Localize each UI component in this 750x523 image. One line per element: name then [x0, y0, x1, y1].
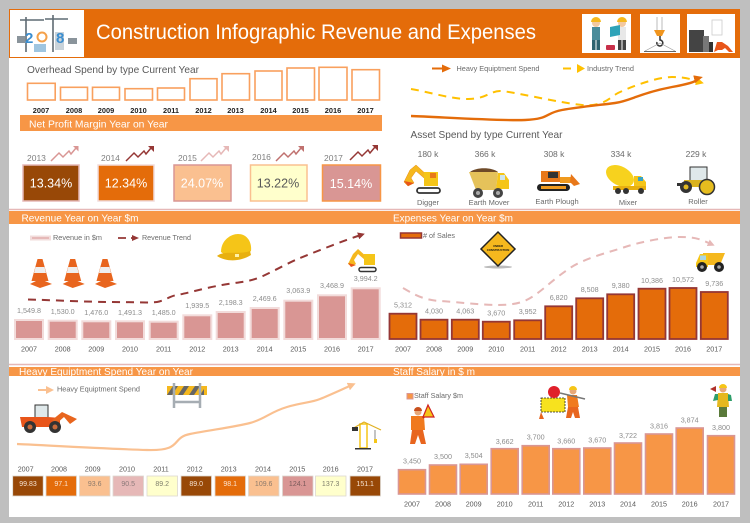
panel: revenue	[9, 211, 389, 354]
outlined bars	[28, 67, 380, 100]
year axis: heavy equipment: 2007	[18, 464, 34, 474]
icon: wheel loader	[20, 405, 77, 433]
value labels: heavy equipment cells: 151.1	[356, 481, 374, 488]
title: Construction Infographic Revenue and Expenses	[96, 21, 536, 44]
year axis: staff salary	[404, 500, 729, 508]
kpi 2014	[98, 146, 154, 201]
heading band: staff salary: Staff Salary in $ m	[393, 366, 475, 378]
icon: worker with warning sign	[410, 405, 434, 444]
value labels: expenses: 9,380	[612, 281, 630, 290]
heading band: revenue	[9, 211, 389, 224]
icon: buildings and excavator	[687, 14, 735, 53]
kpi 2013: 2013	[27, 153, 46, 163]
line: expense trend	[403, 237, 711, 305]
icon: workers	[582, 14, 631, 53]
panel: staff salary	[389, 366, 740, 508]
year axis: staff salary: 2009	[466, 500, 482, 508]
kpi 2016: 2016	[252, 152, 271, 162]
value labels: expenses: 9,736	[705, 279, 723, 288]
year axis: 2016	[325, 106, 341, 115]
kpi 2013: 13.34%	[30, 176, 72, 190]
heading band: Net Profit Margin Year on Year	[29, 118, 168, 130]
year axis: revenue: 2014	[257, 344, 273, 354]
year axis: staff salary: 2010	[497, 500, 513, 508]
line: heavy equipment	[17, 385, 352, 450]
bar chart: expenses	[390, 288, 728, 339]
legend: expenses: # of Sales	[423, 231, 455, 240]
value labels: expenses: 3,670	[487, 308, 505, 318]
legend: revenue	[31, 233, 102, 242]
legend: heavy equipment spend: Heavy Equiptment Spend	[456, 64, 540, 73]
kpi 2017: 2017	[324, 153, 343, 163]
year axis: staff salary: 2015	[651, 500, 667, 508]
heading band: heavy equipment	[9, 366, 389, 378]
value labels: heavy equipment cells: 97.1	[54, 481, 68, 488]
bar chart: staff salary	[398, 428, 734, 494]
value labels: staff salary: 3,700	[527, 432, 545, 442]
asset: earth plough	[535, 149, 580, 206]
asset: earth mover	[469, 149, 510, 207]
asset: digger: Digger	[417, 198, 440, 207]
year axis: 2007	[33, 106, 49, 115]
value labels: staff salary: 3,722	[619, 431, 637, 440]
kpi 2015: 2015	[178, 153, 197, 163]
value labels: staff salary: 3,816	[650, 422, 668, 430]
year axis: heavy equipment: 2009	[85, 464, 101, 474]
value labels: staff salary	[403, 416, 730, 466]
year axis: revenue: 2009	[88, 344, 104, 354]
year axis: heavy equipment: 2013	[221, 464, 237, 474]
value labels: heavy equipment cells: 89.0	[189, 481, 203, 488]
asset: earth mover: Earth Mover	[469, 198, 510, 207]
year axis: revenue: 2010	[122, 344, 138, 354]
value labels: staff salary: 3,500	[434, 452, 452, 461]
value labels: expenses: 4,030	[425, 306, 443, 316]
asset: earth plough: 308 k	[544, 149, 565, 159]
kpi 2017: 15.14%	[330, 177, 372, 191]
asset: roller: 229 k	[686, 149, 707, 159]
line: industry trend	[411, 77, 699, 105]
year axis: expenses: 2015	[644, 344, 660, 354]
legend: revenue trend: Revenue Trend	[142, 233, 191, 242]
year axis: heavy equipment: 2014	[255, 464, 271, 474]
asset: roller	[677, 149, 714, 206]
year axis: 2012	[195, 106, 212, 115]
year axis: heavy equipment: 2011	[153, 464, 169, 474]
asset: digger: 180 k	[418, 149, 439, 159]
value labels: heavy equipment cells: 89.2	[155, 481, 169, 488]
heading: overhead spend: Overhead Spend by type Current Year	[27, 64, 199, 76]
value labels: staff salary: 3,800	[712, 423, 730, 432]
asset: mixer	[602, 149, 646, 207]
legend: revenue trend	[118, 233, 191, 242]
value labels: revenue: 1,530.0	[51, 307, 75, 316]
logo: 2018 construction: 8	[56, 30, 64, 47]
kpi 2017	[322, 145, 380, 201]
value labels: revenue: 3,994.2	[354, 274, 378, 283]
year axis: heavy equipment: 2015	[289, 464, 305, 474]
year axis: expenses: 2011	[520, 344, 535, 354]
year axis: staff salary: 2013	[589, 500, 605, 508]
year axis: revenue: 2011	[156, 344, 171, 354]
asset: digger	[404, 149, 440, 207]
year axis: expenses: 2009	[457, 344, 473, 354]
year axis: expenses: 2007	[395, 344, 411, 354]
panel: overhead spend	[27, 64, 380, 115]
year axis: revenue: 2008	[55, 344, 71, 354]
value labels: revenue: 1,491.3	[118, 308, 142, 317]
year axis: staff salary: 2014	[620, 500, 636, 508]
kpi 2016: 13.22%	[257, 176, 299, 190]
value labels: heavy equipment cells: 99.83	[19, 481, 37, 488]
heading band: expenses: Expenses Year on Year $m	[393, 212, 513, 224]
value labels: staff salary: 3,660	[557, 436, 575, 446]
legend: heavy equipment: Heavy Equiptment Spend	[57, 384, 140, 394]
logo: 2018 construction	[10, 10, 84, 57]
year axis: 2009	[98, 106, 114, 115]
year axis: expenses: 2016	[675, 344, 691, 354]
icon: worker with construction barrier	[539, 386, 585, 419]
year axis: revenue: 2012	[189, 344, 205, 354]
heading: asset spend: Asset Spend by type Current Year	[410, 129, 563, 141]
year axis: 2015	[292, 106, 309, 115]
year axis: revenue: 2007	[21, 344, 37, 354]
icon: under construction sign: CONSTRUCTION	[487, 248, 509, 252]
asset: roller: Roller	[688, 197, 708, 206]
year axis: expenses: 2013	[582, 344, 598, 354]
year axis: staff salary: 2008	[435, 500, 451, 508]
value labels: heavy equipment cells: 93.6	[88, 481, 102, 488]
panel: net profit margin	[20, 115, 382, 201]
year axis	[33, 106, 374, 115]
line: heavy equipment spend	[411, 78, 699, 120]
heading band: heavy equipment: Heavy Equiptment Spend Year on Year	[19, 366, 193, 378]
asset: earth mover: 366 k	[475, 149, 496, 159]
asset: mixer: Mixer	[619, 198, 638, 207]
heading band	[20, 115, 382, 131]
heading band: expenses	[389, 211, 740, 224]
year axis: heavy equipment: 2010	[119, 464, 135, 474]
year axis: expenses: 2010	[488, 344, 504, 354]
value labels: staff salary: 3,450	[403, 456, 421, 466]
year axis: heavy equipment: 2017	[357, 464, 373, 474]
value labels: revenue: 1,549.8	[17, 306, 41, 315]
value labels: revenue	[17, 274, 378, 317]
icon: crane hook	[640, 14, 680, 53]
value labels: heavy equipment cells: 90.5	[121, 481, 135, 488]
icon: dump truck	[696, 253, 725, 272]
value labels: expenses: 3,952	[519, 307, 537, 316]
logo: 2018 construction: 2	[25, 30, 33, 47]
value labels: expenses: 5,312	[394, 300, 412, 310]
icon: small digger	[348, 249, 376, 272]
year axis: 2010	[130, 106, 147, 115]
header banner	[9, 9, 740, 58]
legend: staff salary: Staff Salary $m	[414, 391, 463, 400]
value labels: revenue: 1,485.0	[152, 308, 176, 317]
value labels: heavy equipment cells: 124.1	[289, 481, 307, 488]
kpi 2013	[23, 146, 79, 201]
year axis: 2014	[260, 106, 278, 115]
value labels: expenses: 8,508	[581, 285, 599, 294]
year axis: 2011	[163, 106, 179, 115]
icon: under construction sign: UNDER	[493, 244, 503, 248]
value cells: heavy equipment	[13, 476, 380, 496]
section divider	[9, 210, 740, 364]
value labels: heavy equipment cells: 98.1	[223, 481, 237, 488]
line: revenue trend	[28, 235, 361, 302]
year axis: 2017	[357, 106, 374, 115]
value labels: heavy equipment cells: 109.6	[255, 481, 273, 488]
heading band: revenue: Revenue Year on Year $m	[22, 212, 139, 224]
legend: revenue: Revenue in $m	[53, 233, 102, 242]
asset: mixer: 334 k	[611, 149, 632, 159]
year axis: revenue: 2015	[290, 344, 306, 354]
icon: barrier	[167, 383, 207, 408]
year axis: heavy equipment	[18, 464, 373, 474]
heading band: staff salary	[389, 366, 740, 378]
value labels: heavy equipment cells	[19, 481, 374, 488]
year axis: expenses: 2008	[426, 344, 442, 354]
kpi 2014: 2014	[101, 153, 120, 163]
value labels: revenue: 1,939.5	[185, 301, 209, 310]
bar chart: revenue	[15, 288, 380, 339]
asset: earth plough: Earth Plough	[535, 197, 579, 206]
year axis: revenue: 2013	[223, 344, 239, 354]
year axis: revenue	[21, 344, 374, 354]
value labels: expenses: 10,386	[641, 276, 663, 285]
value labels: revenue: 2,469.6	[253, 294, 277, 303]
icon: tower crane	[352, 422, 381, 450]
year axis: expenses: 2017	[706, 344, 722, 354]
legend: industry trend	[563, 64, 634, 73]
year axis: staff salary: 2016	[682, 500, 698, 508]
value labels: staff salary: 3,662	[496, 437, 514, 446]
year axis: expenses	[395, 344, 722, 354]
icon: under construction sign	[481, 232, 515, 268]
value labels: revenue: 2,198.3	[219, 298, 243, 307]
year axis: expenses: 2014	[613, 344, 629, 354]
year axis: revenue: 2016	[324, 344, 340, 354]
year axis: 2008	[66, 106, 82, 115]
panel: asset spend	[404, 129, 714, 207]
year axis: staff salary: 2012	[558, 500, 574, 508]
value labels: staff salary: 3,874	[681, 416, 699, 424]
year axis: heavy equipment: 2008	[51, 464, 67, 474]
year axis: expenses: 2012	[551, 344, 567, 354]
value labels: staff salary: 3,504	[465, 451, 483, 460]
kpi 2016	[250, 146, 307, 201]
value labels: revenue: 3,063.9	[286, 286, 310, 295]
kpi 2015	[174, 146, 231, 201]
value labels: expenses: 10,572	[672, 275, 694, 284]
icon: traffic cones	[30, 259, 117, 288]
kpi 2015: 24.07%	[181, 176, 223, 190]
value labels: expenses	[394, 275, 723, 318]
panel: heavy equipment	[9, 366, 389, 496]
panel: expenses	[389, 211, 740, 354]
year axis: staff salary: 2007	[404, 500, 420, 508]
value labels: revenue: 1,476.0	[84, 308, 108, 317]
value labels: staff salary: 3,670	[588, 436, 606, 444]
year axis: heavy equipment: 2012	[187, 464, 203, 474]
icon: worker with drill	[710, 384, 732, 417]
year axis: staff salary: 2011	[528, 500, 543, 508]
value labels: heavy equipment cells: 137.3	[322, 481, 340, 488]
year axis: 2013	[227, 106, 244, 115]
year axis: heavy equipment: 2016	[323, 464, 339, 474]
icon: hard hat	[217, 234, 251, 260]
year axis: revenue: 2017	[358, 344, 374, 354]
legend: expenses	[400, 231, 455, 240]
value labels: expenses: 6,820	[550, 293, 568, 302]
value labels: expenses: 4,063	[456, 306, 474, 316]
year axis: staff salary: 2017	[713, 500, 729, 508]
legend: industry trend: Industry Trend	[587, 64, 634, 73]
value labels: revenue: 3,468.9	[320, 281, 344, 290]
kpi 2014: 12.34%	[105, 176, 147, 190]
panel: trend lines	[411, 64, 699, 120]
